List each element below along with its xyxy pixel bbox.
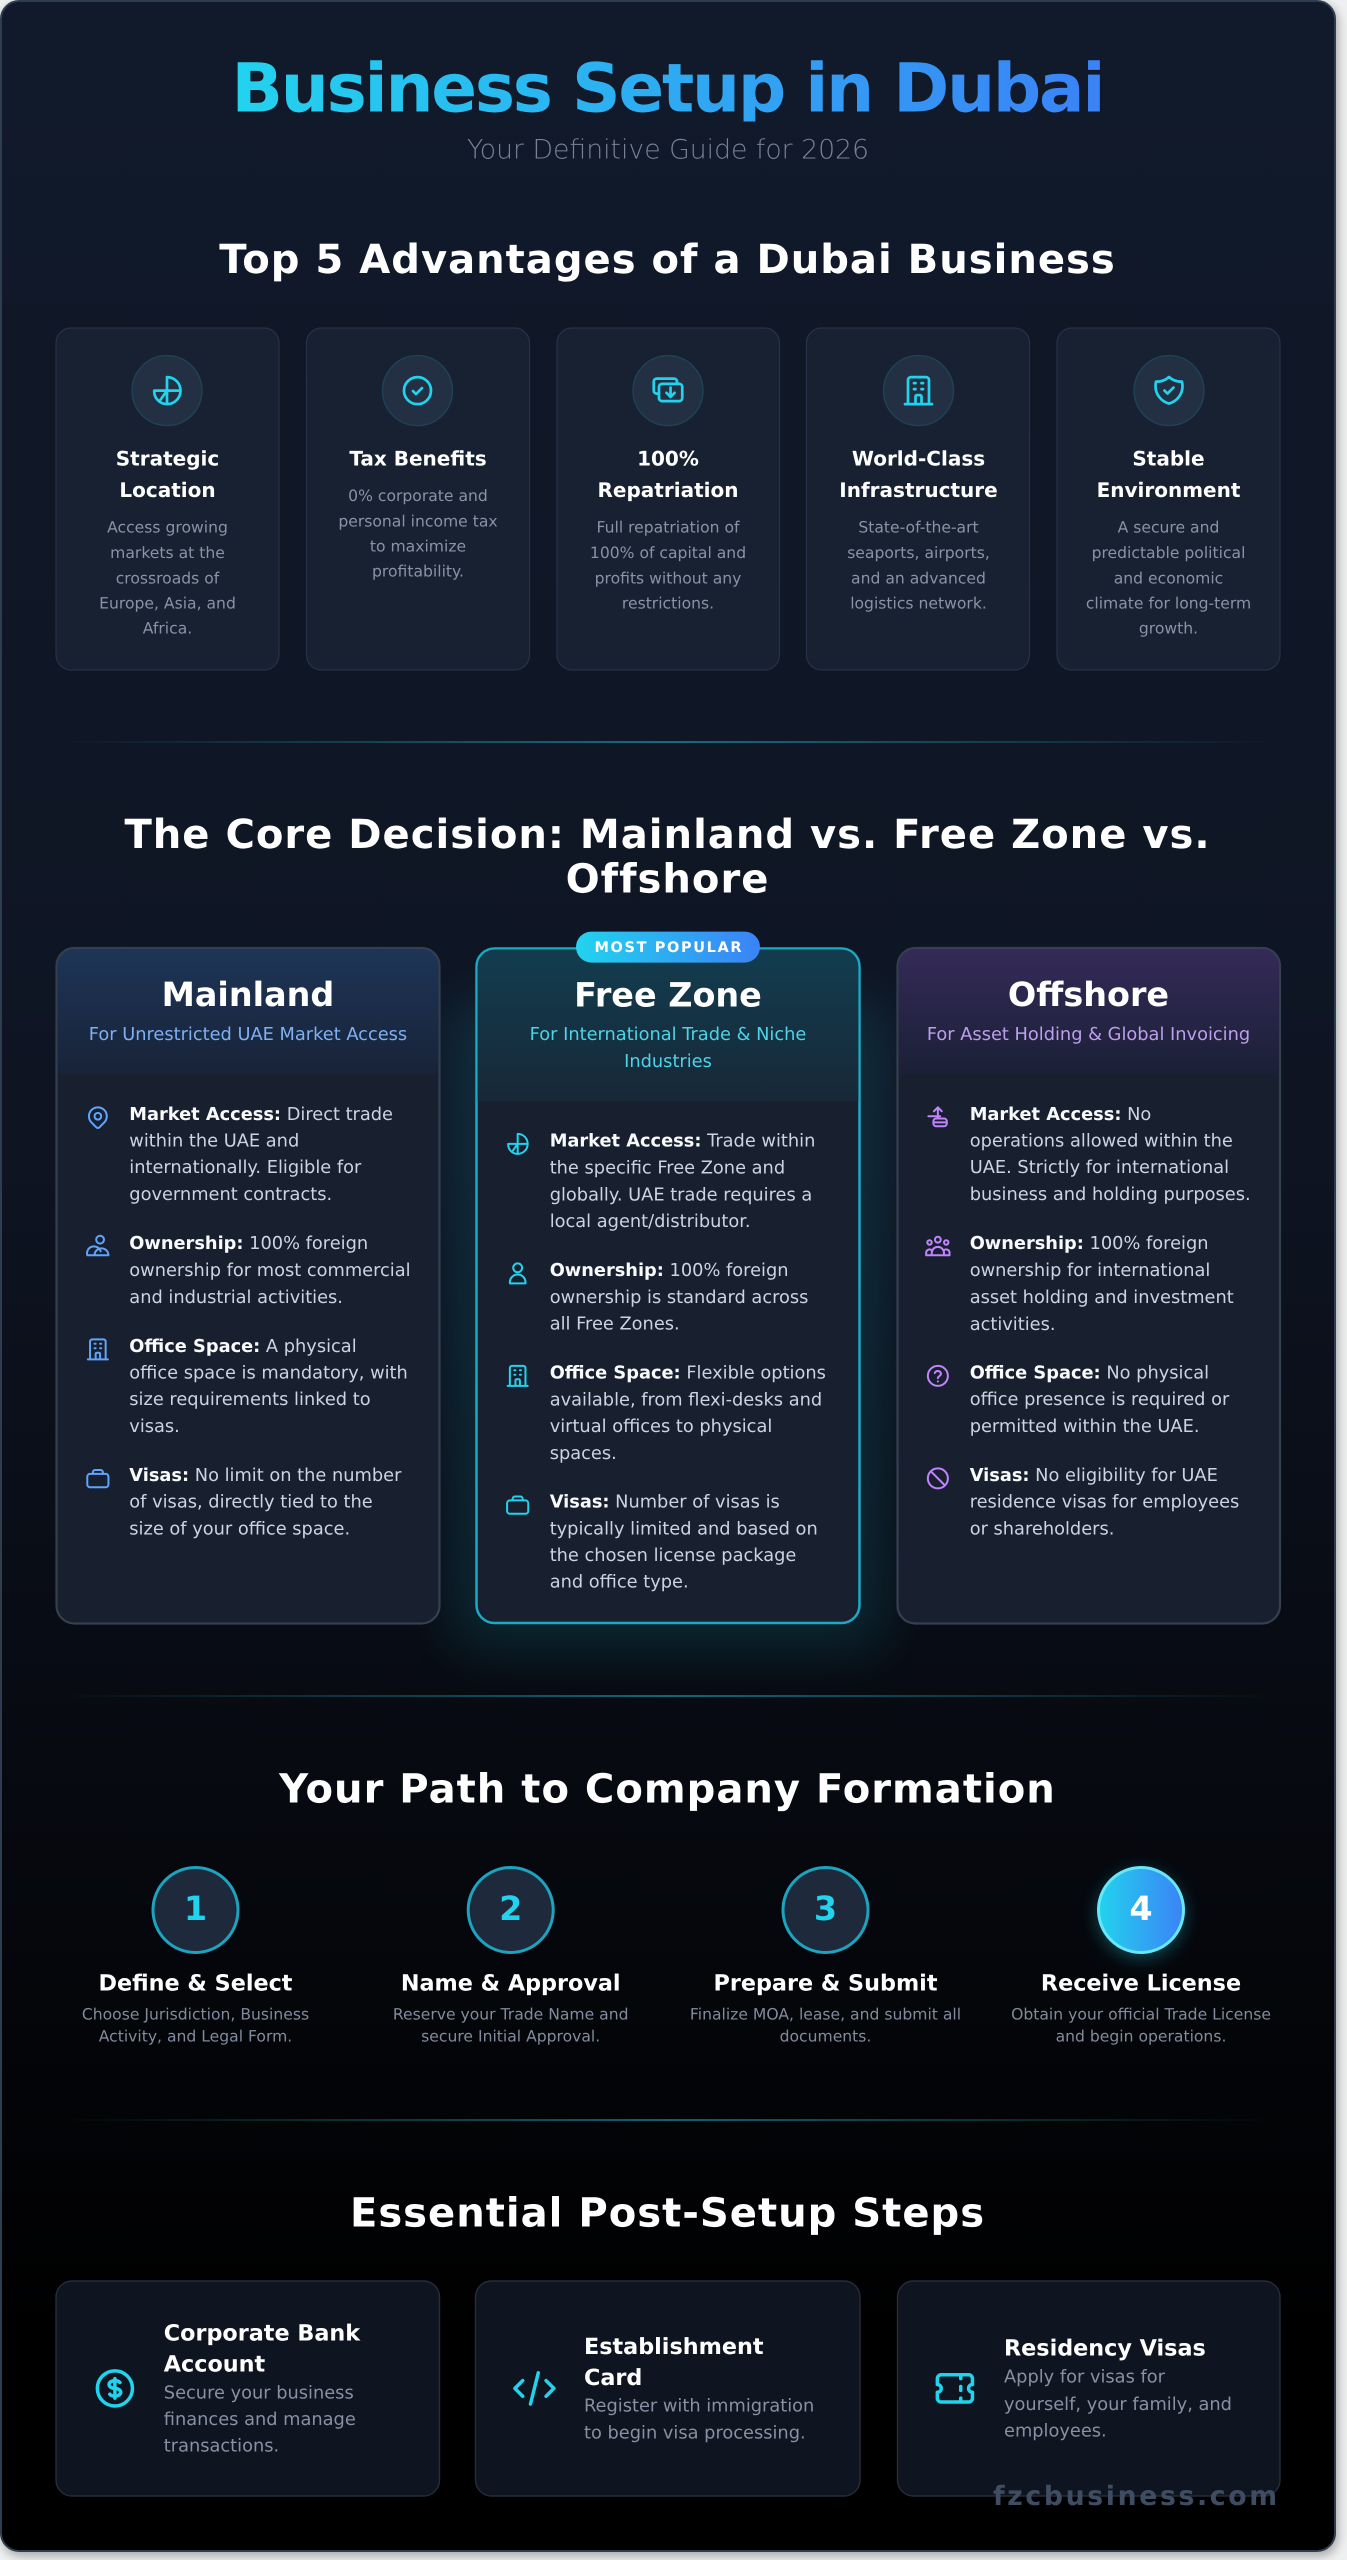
heading: essential post-setup steps: Essential Post-Setup Steps — [350, 2190, 985, 2236]
text: infrastructure: seaports, airports, — [847, 544, 990, 562]
text: corporate bank account: finances and manage — [164, 2409, 356, 2430]
step 1: 1 — [184, 1889, 207, 1928]
heading: core decision: Offshore — [566, 857, 769, 903]
header: mainland: For Unrestricted UAE Market Access — [89, 1024, 407, 1045]
heading: core decision — [124, 812, 1211, 903]
icon: location pie — [132, 356, 202, 426]
item: visas: the chosen license package — [550, 1545, 796, 1566]
item: ownership: asset holding and investment — [970, 1287, 1234, 1308]
text: strategic location: Location — [119, 478, 216, 502]
item: market access: the specific Free Zone and — [550, 1158, 785, 1179]
item: visas: Visas: No limit on the number — [129, 1465, 402, 1486]
step 1 — [82, 1868, 309, 2046]
item: office space: permitted within the UAE. — [970, 1416, 1199, 1437]
panel: stable environment — [1057, 328, 1280, 670]
panel: establishment card — [476, 2281, 860, 2496]
panel: mainland — [56, 948, 440, 1624]
item: visas — [87, 1465, 402, 1539]
item: market access: UAE. Strictly for international — [970, 1157, 1229, 1178]
text: strategic location: markets at the — [110, 544, 225, 562]
step 1: Activity, and Legal Form. — [99, 2028, 292, 2046]
text: stable environment: Environment — [1097, 478, 1241, 502]
step 1: Choose Jurisdiction, Business — [82, 2005, 309, 2023]
step 3: Finalize MOA, lease, and submit all — [690, 2005, 961, 2023]
text: stable environment: predictable political — [1092, 544, 1245, 562]
text: repatriation: Repatriation — [598, 478, 738, 502]
text: corporate bank account — [164, 2321, 361, 2457]
panel: tax benefits — [306, 328, 530, 670]
step 4: and begin operations. — [1056, 2028, 1226, 2046]
text: repatriation: profits without any — [595, 569, 741, 587]
item: market access: Market Access: No — [970, 1104, 1151, 1125]
text: corporate bank account: transactions. — [164, 2436, 279, 2457]
item: office space: office presence is required or — [970, 1389, 1230, 1410]
item: office space: spaces. — [550, 1443, 617, 1464]
icon: dollar — [97, 2371, 132, 2406]
item: market access: Market Access: Trade within — [550, 1131, 815, 1152]
text: establishment card — [584, 2334, 814, 2443]
item: office space: Office Space: No physical — [970, 1362, 1209, 1384]
badge: most popular: MOST POPULAR — [594, 940, 742, 956]
text: repatriation: 100% — [637, 447, 699, 471]
text: infrastructure: World-Class — [852, 447, 985, 471]
panel: offshore — [898, 948, 1280, 1624]
item: market access — [508, 1131, 815, 1232]
item: ownership: ownership is standard across — [550, 1287, 808, 1308]
item: office space: available, from flexi-desks and — [550, 1390, 822, 1410]
text: corporate bank account: Secure your business — [164, 2382, 354, 2403]
text: establishment card: Establishment — [584, 2334, 764, 2360]
text: stable environment: Stable — [1132, 447, 1205, 471]
item: ownership: Ownership: 100% foreign — [970, 1233, 1209, 1254]
step 4 — [1011, 1868, 1271, 2046]
step 4: Receive License — [1041, 1971, 1241, 1997]
text: tax benefits — [338, 447, 498, 580]
text: tax benefits: profitability. — [372, 562, 464, 580]
text: stable environment: growth. — [1139, 619, 1198, 637]
text: strategic location: crossroads of — [116, 569, 220, 587]
item: market access: government contracts. — [129, 1184, 332, 1205]
item: visas: of visas, directly tied to the — [129, 1492, 373, 1513]
item: market access: business and holding purposes. — [970, 1184, 1251, 1205]
step 3: Prepare & Submit — [714, 1971, 938, 1997]
item: office space: visas. — [129, 1416, 180, 1437]
text: corporate bank account: Corporate Bank — [164, 2321, 361, 2347]
watermark: fzcbusiness.com — [993, 2481, 1277, 2512]
item: office space: office space is mandatory, with — [129, 1362, 408, 1384]
text: establishment card: Card — [584, 2365, 642, 2391]
item: ownership: Ownership: 100% foreign — [129, 1233, 368, 1254]
header: free zone — [478, 950, 858, 1101]
header: free zone: Industries — [624, 1051, 712, 1072]
item: ownership: activities. — [970, 1314, 1056, 1335]
item: market access: within the UAE and — [129, 1130, 299, 1152]
item: visas: and office type. — [550, 1572, 689, 1593]
item: ownership: all Free Zones. — [550, 1314, 680, 1334]
item: ownership — [926, 1233, 1234, 1335]
text: stable environment — [1086, 447, 1251, 637]
text: stable environment: A secure and — [1118, 518, 1219, 536]
text: tax benefits: 0% corporate and — [348, 487, 488, 505]
item: ownership: ownership for most commercial — [129, 1260, 411, 1281]
item: office space — [508, 1362, 826, 1464]
text: residency visas: Residency Visas — [1004, 2336, 1206, 2362]
item: ownership — [87, 1233, 411, 1308]
header: offshore: For Asset Holding & Global Invoicing — [927, 1024, 1250, 1045]
text: residency visas: employees. — [1004, 2421, 1107, 2442]
subtitle: Your Definitive Guide for 2026 — [467, 134, 869, 166]
text: repatriation: Full repatriation of — [596, 518, 740, 536]
icon: building — [884, 356, 954, 426]
item: office space — [928, 1362, 1230, 1437]
item: market access: internationally. Eligible for — [129, 1157, 362, 1178]
text: stable environment: and economic — [1114, 569, 1223, 587]
panel: infrastructure — [806, 328, 1030, 670]
item: market access — [89, 1104, 393, 1205]
text: tax benefits: personal income tax — [338, 512, 498, 530]
header: free zone: For International Trade & Niche — [530, 1024, 806, 1045]
header: mainland: Mainland — [162, 975, 334, 1014]
item: visas: or shareholders. — [970, 1518, 1114, 1539]
item: visas: Visas: No eligibility for UAE — [970, 1465, 1218, 1486]
panel: repatriation — [557, 328, 780, 670]
icon: ticket — [937, 2375, 972, 2402]
text: strategic location — [99, 447, 236, 637]
icon: check circle — [382, 356, 452, 426]
step 2: Reserve your Trade Name and — [393, 2005, 629, 2023]
item: visas: size of your office space. — [129, 1518, 350, 1539]
icon: money transfer — [633, 356, 703, 426]
item: ownership — [510, 1260, 808, 1334]
header: mainland — [58, 949, 438, 1075]
icon: shield check — [1134, 356, 1204, 426]
item: market access: Market Access: Direct trade — [129, 1104, 393, 1125]
icon: code — [515, 2373, 554, 2404]
step 4: 4 — [1129, 1889, 1153, 1928]
heading: path to company formation: Your Path to Company Formation — [278, 1766, 1056, 1812]
item: market access: operations allowed within the — [970, 1130, 1233, 1152]
text: stable environment: climate for long-term — [1086, 594, 1251, 612]
step 2: secure Initial Approval. — [421, 2028, 600, 2046]
step 2: Name & Approval — [401, 1971, 621, 1997]
step 3 — [690, 1868, 961, 2046]
item: visas: residence visas for employees — [970, 1492, 1239, 1513]
text: repatriation — [590, 447, 746, 612]
panel: strategic location — [56, 328, 279, 670]
header: offshore: Offshore — [1008, 975, 1169, 1014]
item: visas: typically limited and based on — [550, 1519, 818, 1540]
text: strategic location: Africa. — [143, 619, 192, 637]
step 4: Obtain your official Trade License — [1011, 2005, 1271, 2023]
item: office space — [88, 1336, 408, 1437]
title: Business Setup in Dubai — [232, 48, 1106, 128]
item: ownership: ownership for international — [970, 1260, 1210, 1281]
item: ownership: Ownership: 100% foreign — [550, 1260, 789, 1281]
item: visas — [928, 1465, 1239, 1539]
panel: residency visas — [898, 2281, 1280, 2496]
item: office space: size requirements linked to — [129, 1389, 371, 1410]
text: infrastructure: and an advanced — [851, 569, 986, 587]
item: visas — [507, 1492, 818, 1593]
text: strategic location: Strategic — [116, 447, 219, 471]
panel: free zone — [476, 932, 860, 1623]
text: tax benefits: to maximize — [370, 538, 466, 556]
step 3: 3 — [814, 1889, 837, 1928]
text: establishment card: Register with immigration — [584, 2396, 814, 2417]
header: free zone: Free Zone — [574, 976, 762, 1015]
text: infrastructure — [839, 447, 998, 612]
text: infrastructure: State-of-the-art — [858, 518, 979, 536]
text: tax benefits: Tax Benefits — [349, 447, 487, 471]
item: market access: local agent/distributor. — [550, 1211, 751, 1232]
step 1: Define & Select — [99, 1971, 293, 1997]
heading: core decision: The Core Decision: Mainland vs. Free Zone vs. — [124, 812, 1211, 858]
text: infrastructure: Infrastructure — [839, 478, 998, 502]
item: ownership: and industrial activities. — [129, 1287, 343, 1308]
text: residency visas: Apply for visas for — [1004, 2367, 1166, 2388]
text: infrastructure: logistics network. — [850, 594, 987, 612]
text: establishment card: to begin visa processing. — [584, 2422, 806, 2443]
panel: corporate bank account — [56, 2281, 440, 2496]
badge: most popular — [576, 932, 760, 963]
item: office space: Office Space: Flexible options — [550, 1362, 826, 1384]
item: office space: Office Space: A physical — [129, 1336, 357, 1357]
item: visas: Visas: Number of visas is — [550, 1492, 780, 1513]
text: corporate bank account: Account — [164, 2352, 266, 2378]
item: office space: virtual offices to physical — [550, 1416, 772, 1437]
text: repatriation: restrictions. — [622, 594, 714, 612]
text: residency visas — [1004, 2336, 1232, 2442]
text: strategic location: Access growing — [107, 518, 228, 536]
step 2 — [393, 1868, 629, 2046]
item: market access: globally. UAE trade requires a — [550, 1184, 812, 1206]
heading: advantages: Top 5 Advantages of a Dubai Business — [219, 237, 1116, 283]
item: market access — [928, 1104, 1251, 1205]
step 2: 2 — [499, 1889, 522, 1928]
step 3: documents. — [780, 2028, 871, 2046]
text: residency visas: yourself, your family, and — [1004, 2394, 1232, 2415]
text: repatriation: 100% of capital and — [590, 544, 746, 562]
header: offshore — [899, 949, 1279, 1075]
text: strategic location: Europe, Asia, and — [99, 594, 236, 612]
